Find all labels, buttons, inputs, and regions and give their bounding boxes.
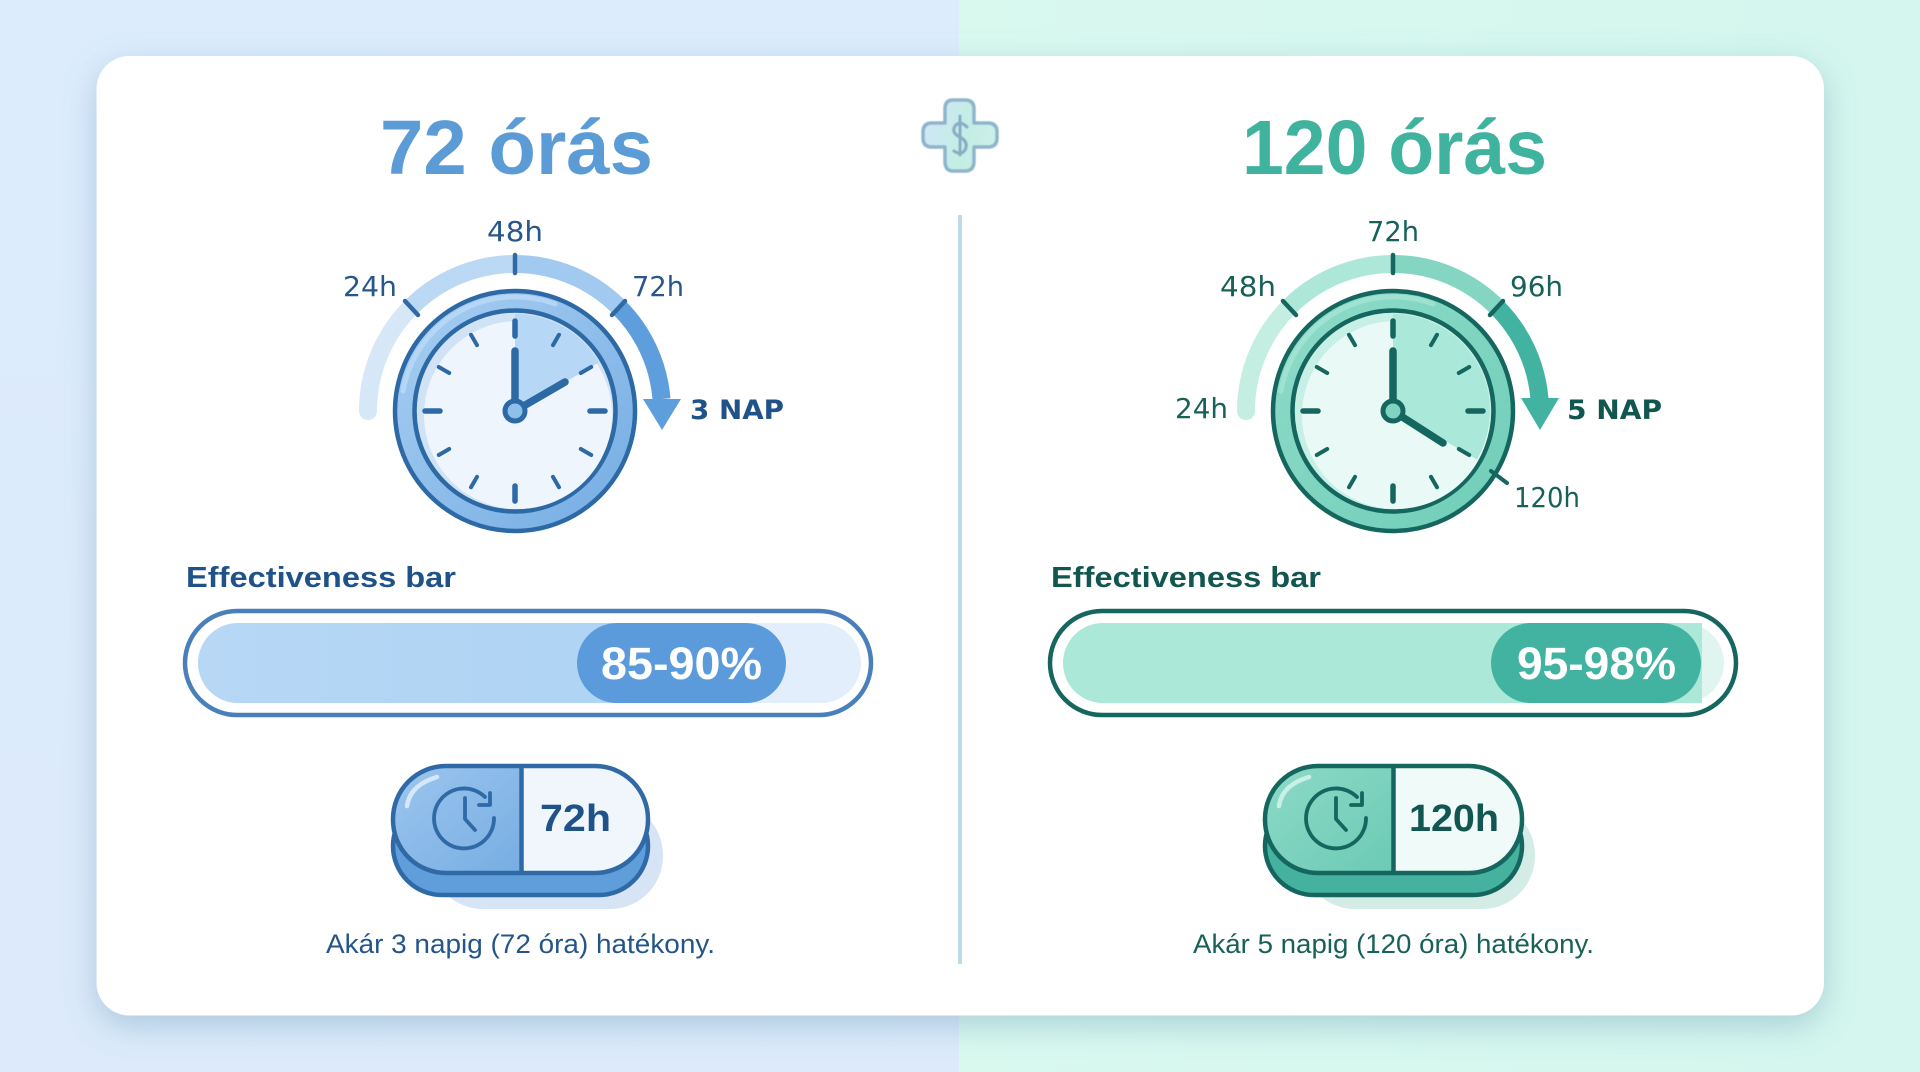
icon: medical cross with dollar sign	[923, 100, 997, 171]
chart: 72h clock gauge	[343, 215, 784, 531]
panel: 120 hour product	[1050, 105, 1736, 959]
background: left blue half	[0, 0, 959, 1072]
label: 24h: 24h	[343, 270, 397, 303]
chart: effectiveness bar 85-90%	[185, 611, 871, 715]
label: 96h: 96h	[1510, 270, 1563, 303]
arc segment: up to 48h	[1246, 307, 1289, 411]
value pill: 85-90%	[601, 638, 762, 689]
title: 120 órás: 120 órás	[1242, 105, 1547, 191]
arc segment: to 72h	[515, 264, 619, 307]
arc segment: up to 24h	[368, 307, 411, 411]
label: 24h: 24h	[1175, 392, 1228, 425]
label: 5 NAP: 5 NAP	[1567, 395, 1662, 426]
clock	[1273, 291, 1513, 531]
value pill	[577, 623, 786, 703]
label: 72h: 72h	[632, 270, 684, 303]
heading: effectiveness bar: Effectiveness bar	[186, 562, 456, 594]
chart: effectiveness bar 95-98%	[1050, 611, 1736, 715]
icon: 72h pill	[393, 766, 663, 909]
arc tick marks	[405, 255, 625, 315]
label: 120h: 120h	[1514, 481, 1580, 514]
chart: 120h clock gauge	[1175, 215, 1662, 531]
heading: effectiveness bar: Effectiveness bar	[1051, 562, 1321, 594]
clock	[395, 291, 635, 531]
icon: clock with arrow	[434, 788, 494, 848]
arc segment: to 72h	[1289, 264, 1393, 307]
caption: 120h: Akár 5 napig (120 óra) hatékony.	[1193, 929, 1594, 959]
center divider	[958, 215, 962, 964]
label: 72h: 72h	[1367, 215, 1419, 248]
label: 120h: 120h	[1409, 798, 1499, 840]
arc tick marks	[1283, 255, 1503, 315]
value pill: 95-98%	[1517, 638, 1676, 689]
arc segment: to 96h	[1393, 264, 1497, 307]
caption: 72h: Akár 3 napig (72 óra) hatékony.	[326, 929, 715, 959]
arrow: to 3 days	[619, 307, 681, 430]
label: 3 NAP: 3 NAP	[690, 395, 784, 426]
value pill	[1491, 623, 1701, 703]
tick: 120h	[1491, 471, 1507, 483]
icon: clock with arrow	[1306, 788, 1366, 848]
icon: 120h pill	[1265, 766, 1535, 909]
arc segment: to 48h	[411, 264, 515, 307]
label: 72h: 72h	[540, 798, 611, 840]
label: 48h: 48h	[1220, 270, 1276, 303]
background: right mint half	[959, 0, 1920, 1072]
label: 48h: 48h	[487, 215, 543, 248]
title: 72 órás: 72 órás	[380, 105, 653, 191]
arrow: to 5 days	[1497, 307, 1559, 430]
panel: 72 hour product	[185, 105, 871, 959]
